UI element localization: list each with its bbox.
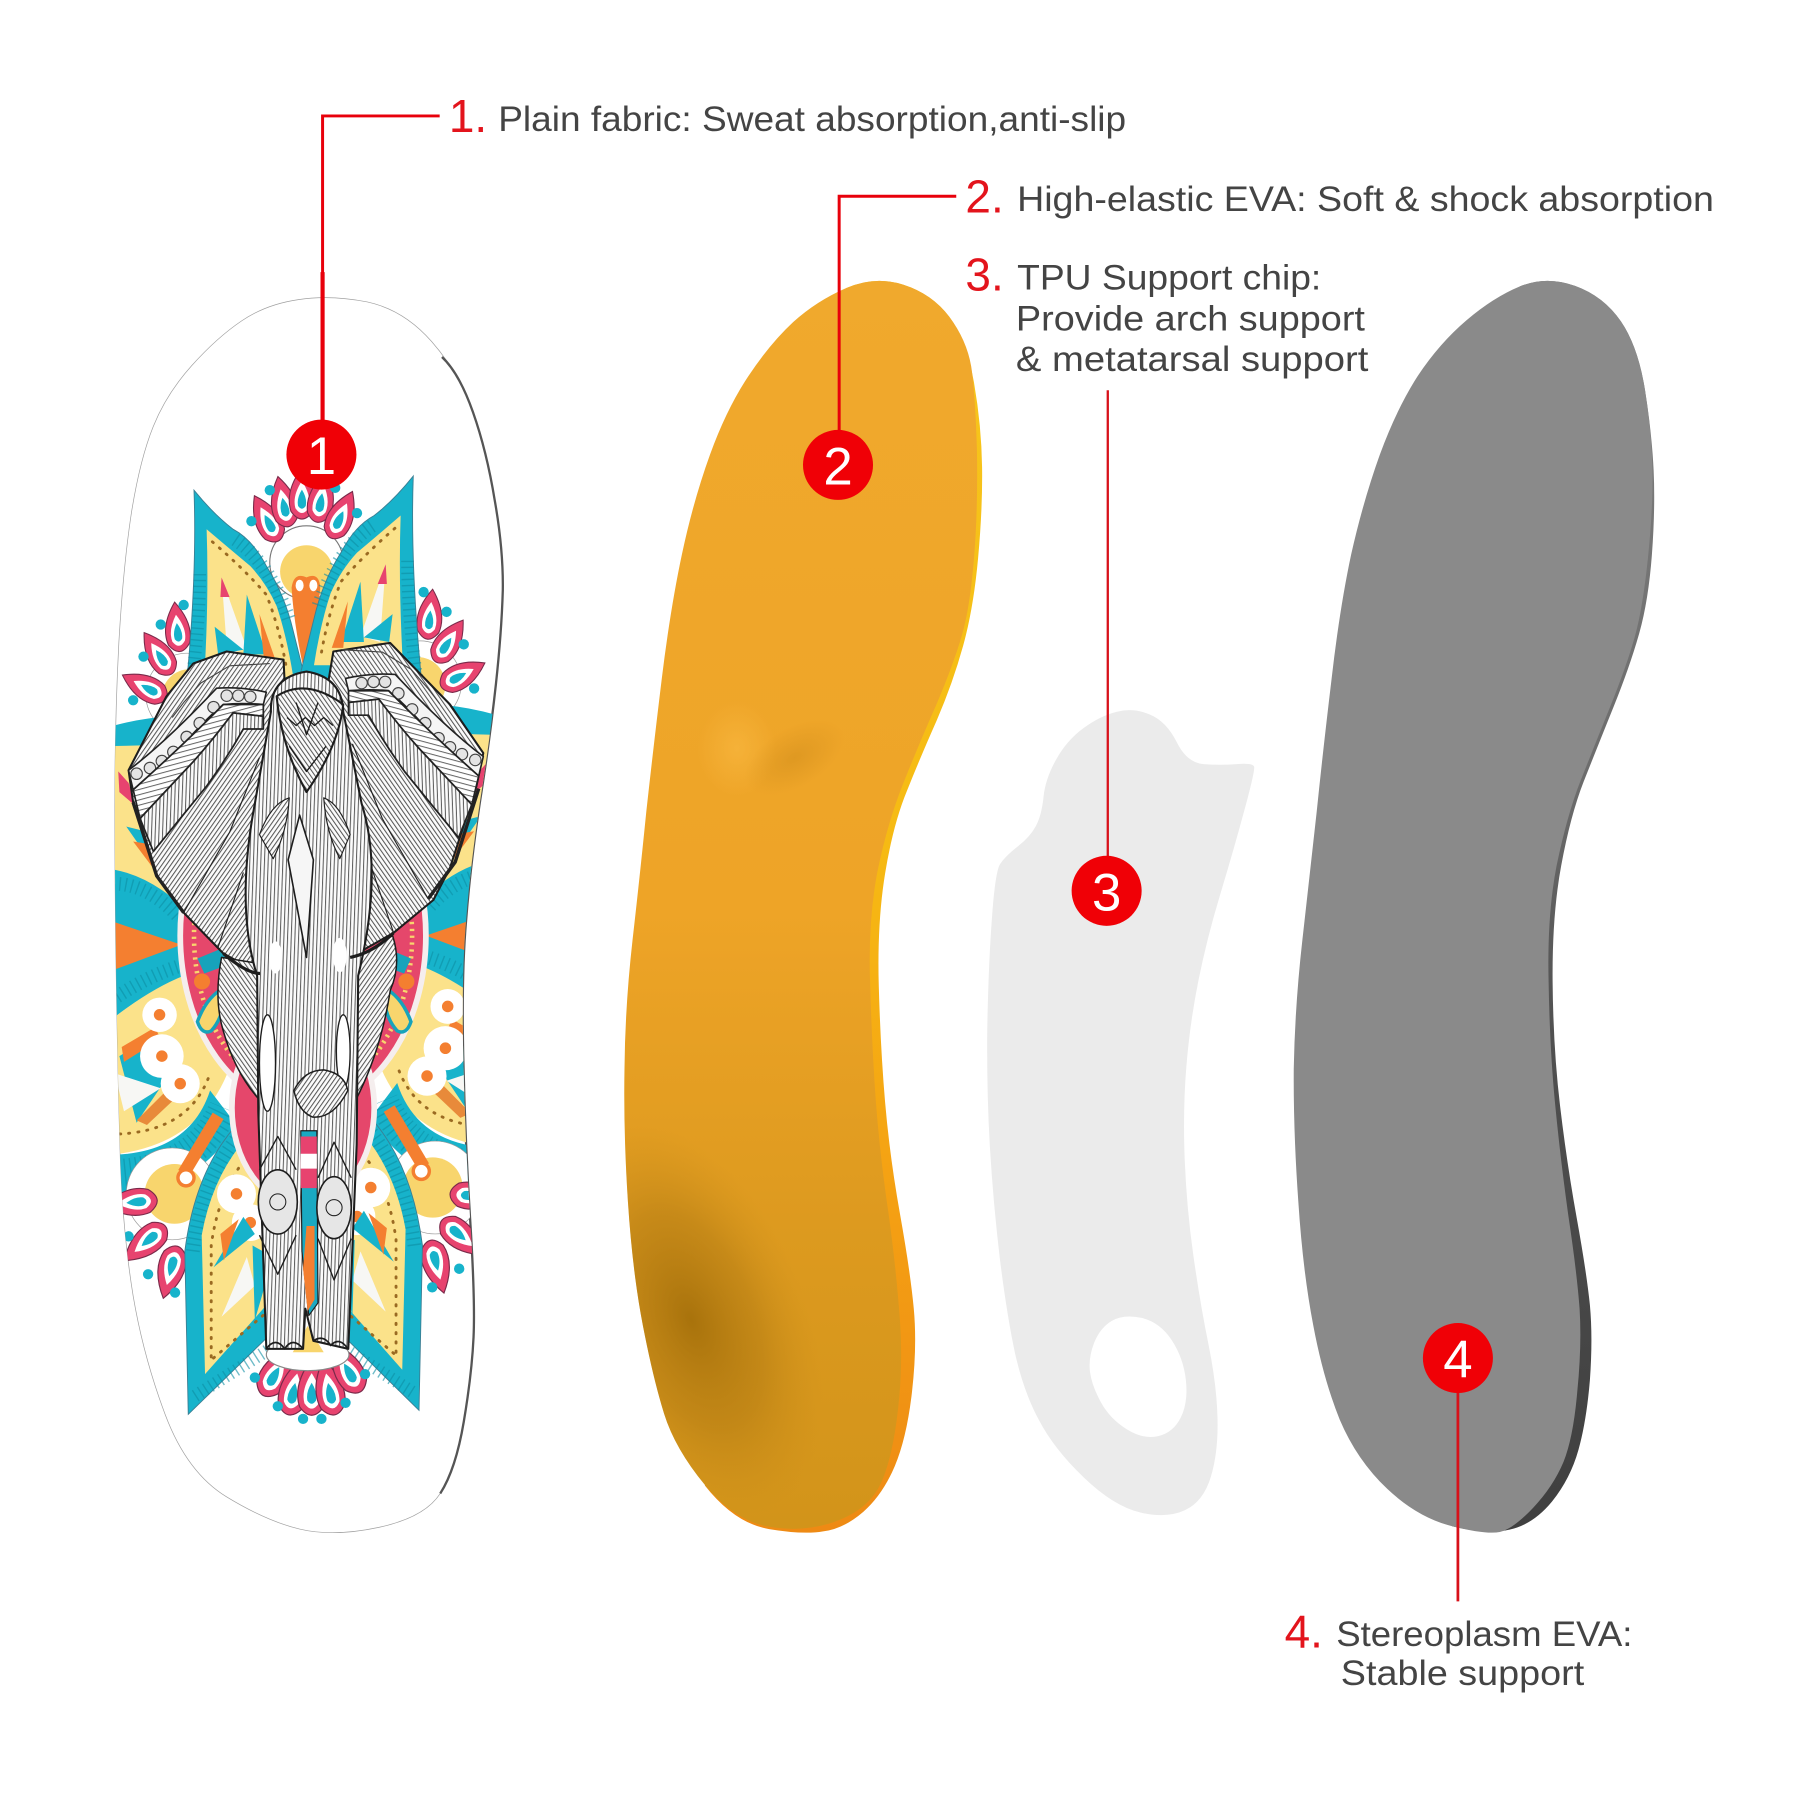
- badge 4: 4: [1443, 1331, 1473, 1390]
- badge 2: 2: [823, 437, 853, 496]
- label 2: [965, 170, 1714, 222]
- label 1: 1.: [449, 90, 487, 142]
- label 4: Stable support: [1341, 1653, 1584, 1693]
- label 3: Provide arch support: [1016, 299, 1365, 339]
- heel hole: [1090, 1316, 1186, 1437]
- label 1: Plain fabric: Sweat absorption,anti-slip: [498, 99, 1126, 139]
- leader line 3: [1107, 390, 1109, 861]
- label 3: 3.: [965, 248, 1004, 300]
- insole 4: stereoplasm EVA layer: [1294, 281, 1654, 1533]
- label 2: High-elastic EVA: Soft & shock absorption: [1017, 179, 1714, 219]
- insole 2: high-elastic EVA layer: [624, 280, 982, 1533]
- badge 2: [803, 430, 873, 500]
- label 4: [1285, 1605, 1632, 1693]
- label 3: TPU Support chip:: [1017, 257, 1321, 297]
- label 4: Stereoplasm EVA:: [1336, 1614, 1632, 1654]
- badge 4: [1423, 1323, 1493, 1393]
- label 4: 4.: [1285, 1605, 1323, 1657]
- badge 3: [1072, 856, 1142, 926]
- label 3: & metatarsal support: [1016, 339, 1368, 379]
- label 3: [965, 248, 1368, 379]
- mandala artwork: [102, 468, 505, 1424]
- elephant illustration: [129, 643, 483, 1349]
- leader line 2: [839, 196, 956, 436]
- badge 1: [286, 420, 356, 490]
- label 1: [449, 90, 1126, 142]
- dark right edge of fabric insole: [440, 357, 503, 1493]
- leader line 1: [323, 116, 440, 425]
- insole 3: TPU support chip: [987, 710, 1254, 1515]
- label 2: 2.: [965, 170, 1004, 222]
- insole 1: plain fabric layer: [102, 298, 505, 1533]
- shading on the heel and arch dimple: [507, 700, 875, 1555]
- badge 3: 3: [1092, 863, 1121, 922]
- leader line 4: [1457, 1389, 1459, 1601]
- badge 1: 1: [307, 427, 336, 486]
